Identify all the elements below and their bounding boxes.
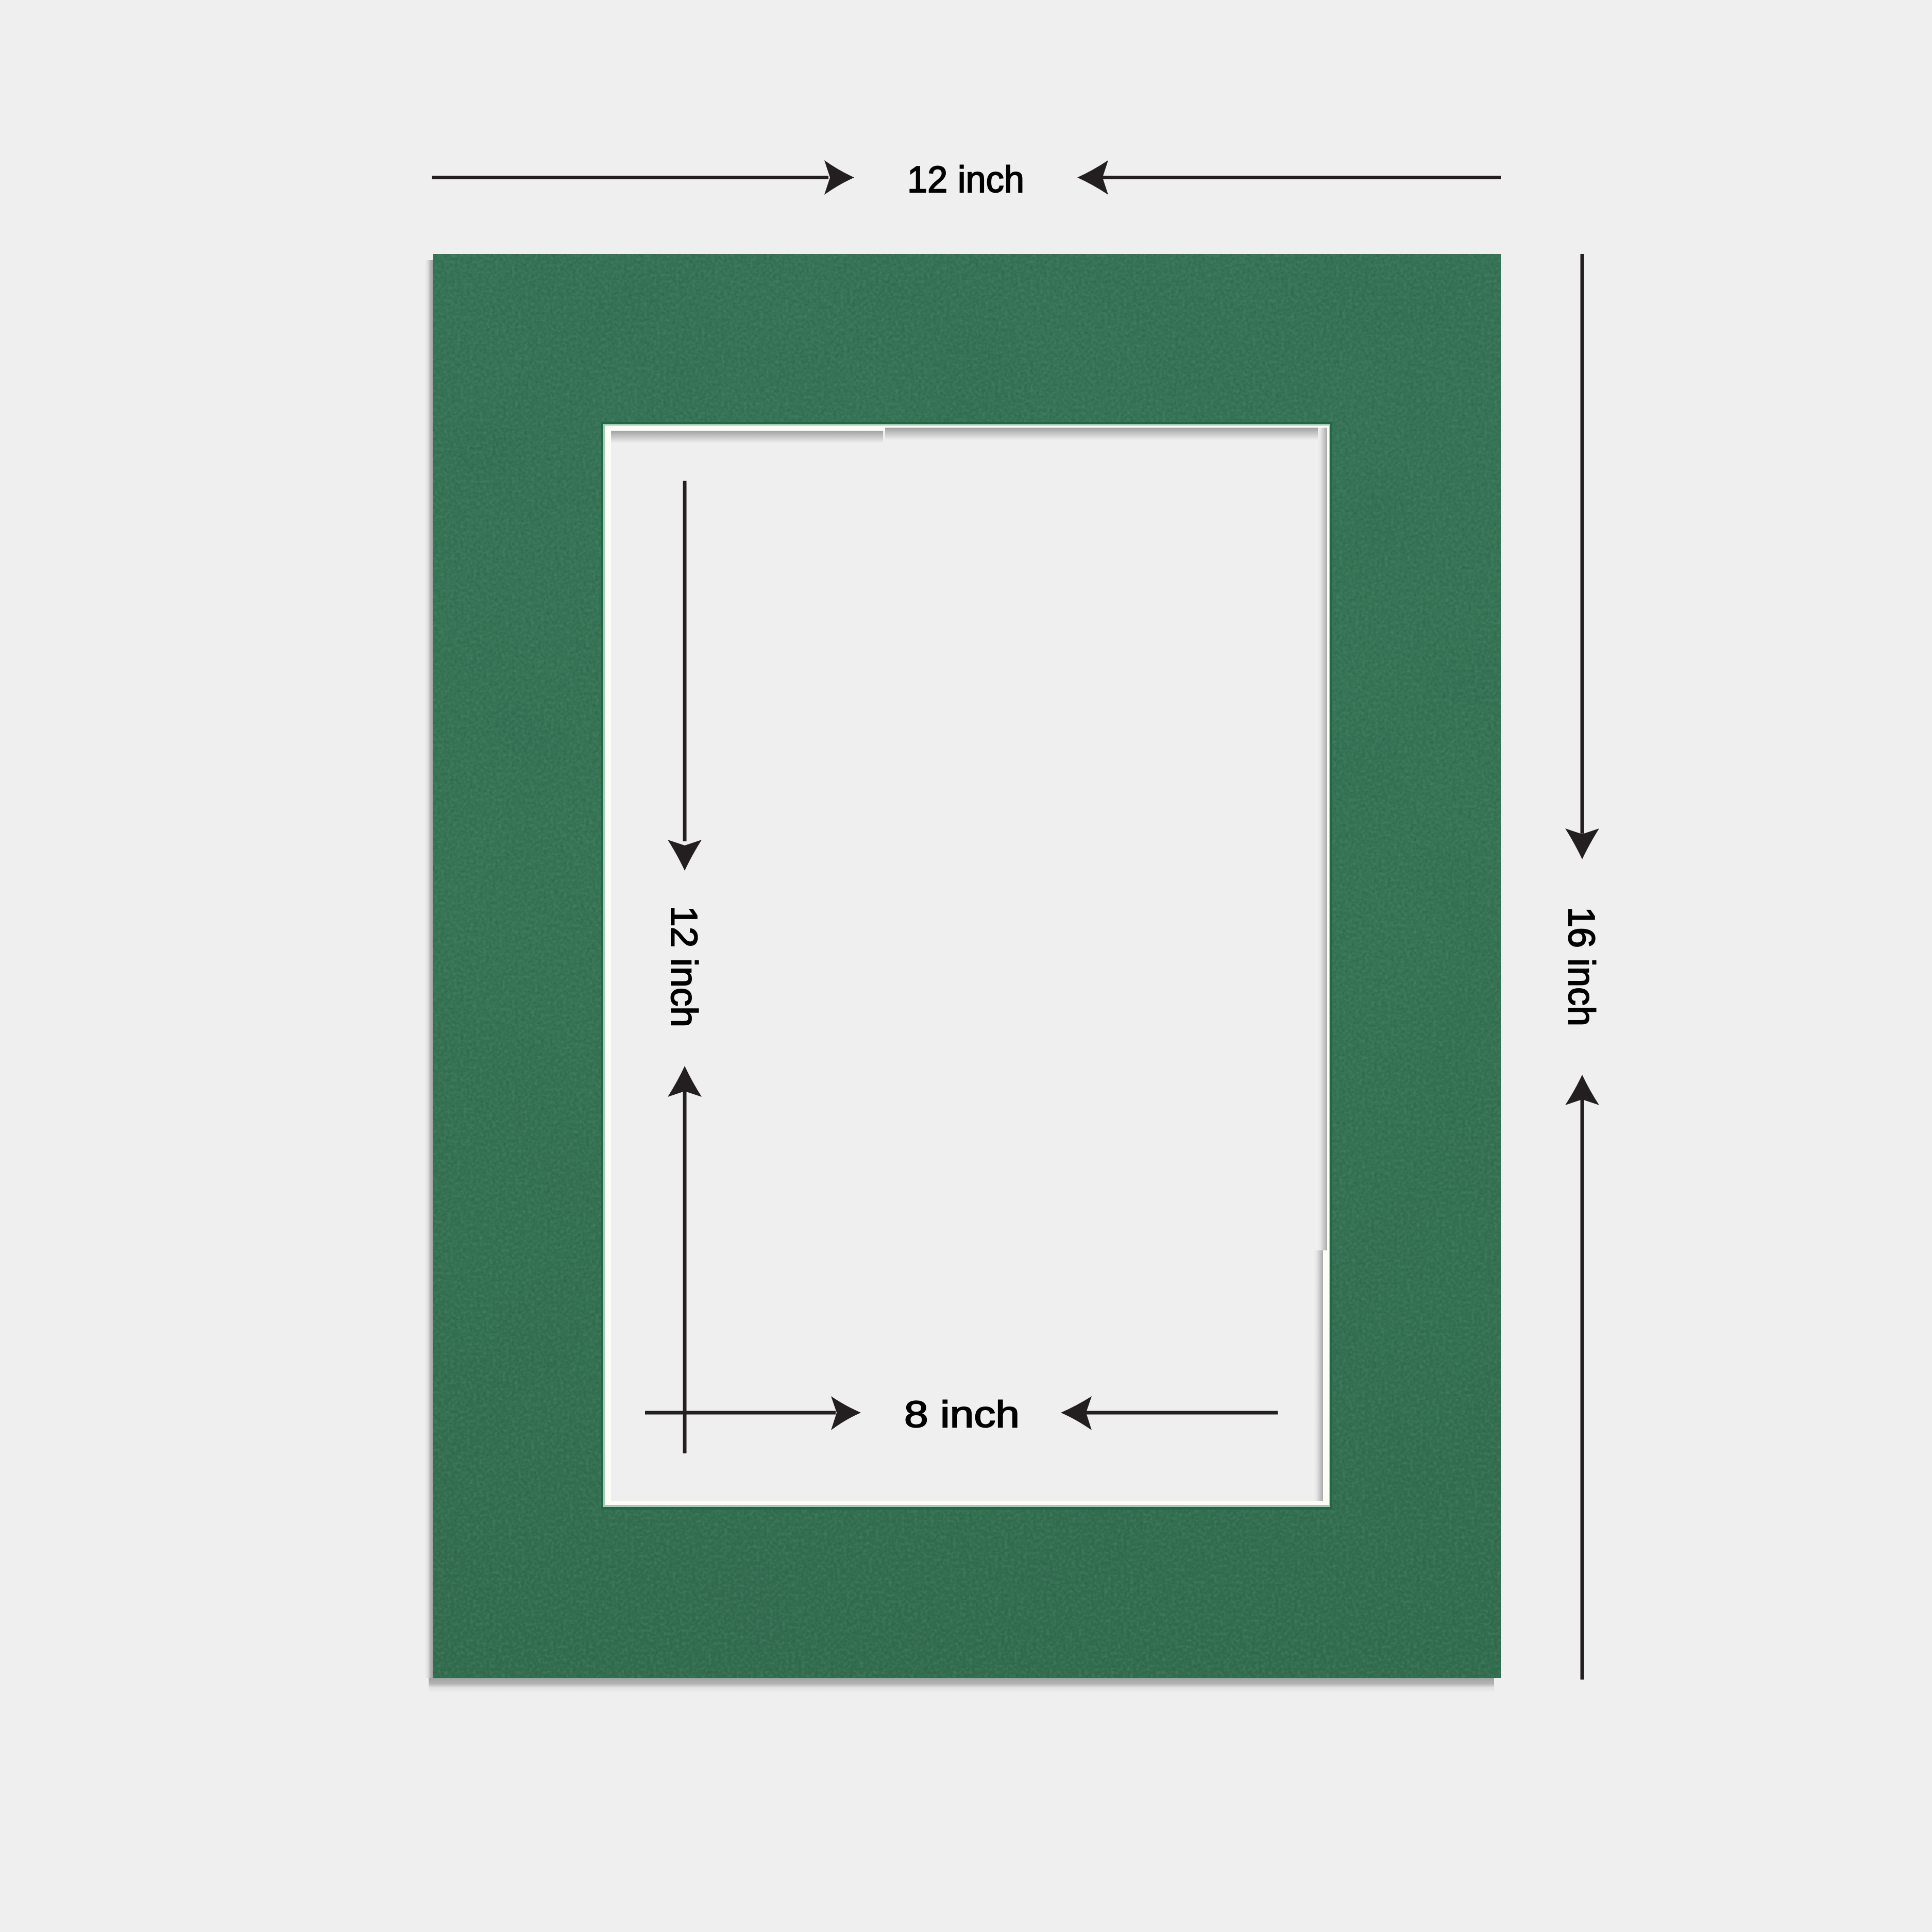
arrow: inner width right [1061,1396,1278,1430]
mat board shadow [425,260,1494,1692]
mat board [425,254,1501,1692]
label: inner width: 8 inch [904,1394,1020,1435]
arrow: inner width left [645,1396,861,1430]
arrow: inner height bottom [668,1066,702,1453]
arrow: outer width right [1077,160,1501,195]
mat window opening [601,422,1332,1510]
arrow: outer height bottom [1565,1075,1599,1680]
green mat surface [433,254,1501,1678]
dimension: inner height 12 inch [663,481,704,1453]
dimension: inner width 8 inch [645,1394,1278,1435]
arrow: outer height top [1565,254,1599,859]
label: outer width: 12 inch [907,159,1024,200]
dimension: outer width 12 inch [432,159,1501,200]
arrow: inner height top [668,481,702,871]
arrow: outer width left [432,160,854,195]
label: outer height: 16 inch [1561,907,1602,1026]
dimension: outer height 16 inch [1561,254,1602,1680]
label: inner height: 12 inch [663,906,704,1027]
